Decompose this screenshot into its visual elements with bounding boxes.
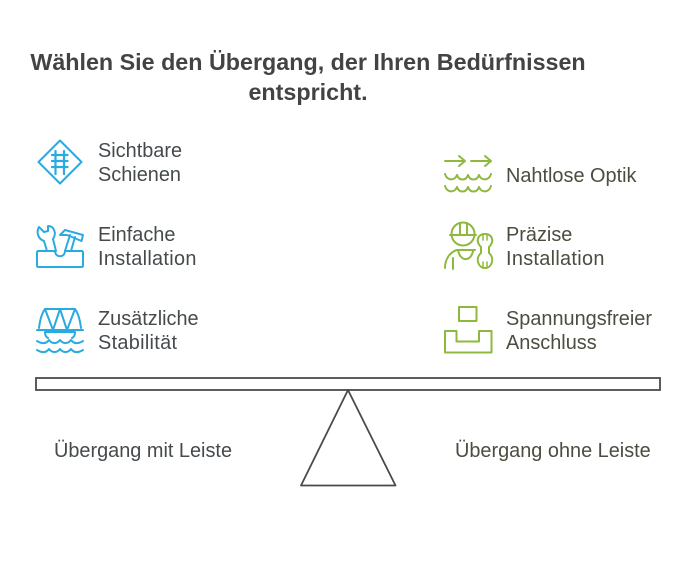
label: Spannungsfreier Anschluss: Spannungsfreier — [506, 308, 652, 330]
label: Einfache Installation: Einfache — [98, 224, 175, 246]
label: Spannungsfreier Anschluss: Anschluss — [506, 332, 597, 354]
label: Präzise Installation: Präzise — [506, 224, 572, 246]
title: Wählen Sie den Übergang, der Ihren Bedürfnissen — [30, 49, 586, 75]
icon: arrows over waves — [445, 156, 491, 192]
seesaw fulcrum — [301, 390, 396, 486]
label: Einfache Installation: Installation — [98, 248, 197, 270]
label: Übergang mit Leiste: Übergang mit Leiste — [54, 440, 232, 462]
label: Zusätzliche Stabilität: Stabilität — [98, 332, 177, 354]
label: Zusätzliche Stabilität: Zusätzliche — [98, 308, 199, 330]
label: Präzise Installation: Installation — [506, 248, 605, 270]
label: Sichtbare Schienen: Schienen — [98, 164, 181, 186]
title — [30, 49, 586, 105]
icon: tools — [37, 226, 83, 267]
icon: connector blocks — [445, 307, 492, 352]
icon: bridge over water — [37, 309, 83, 352]
label: Übergang ohne Leiste: Übergang ohne Leiste — [455, 440, 651, 462]
seesaw beam — [36, 378, 660, 390]
title: entspricht. — [248, 79, 368, 105]
label: Sichtbare Schienen: Sichtbare — [98, 140, 182, 162]
label: Nahtlose Optik: Nahtlose Optik — [506, 165, 637, 187]
icon: railway sign — [38, 140, 82, 184]
icon: worker with wrench — [445, 222, 492, 269]
